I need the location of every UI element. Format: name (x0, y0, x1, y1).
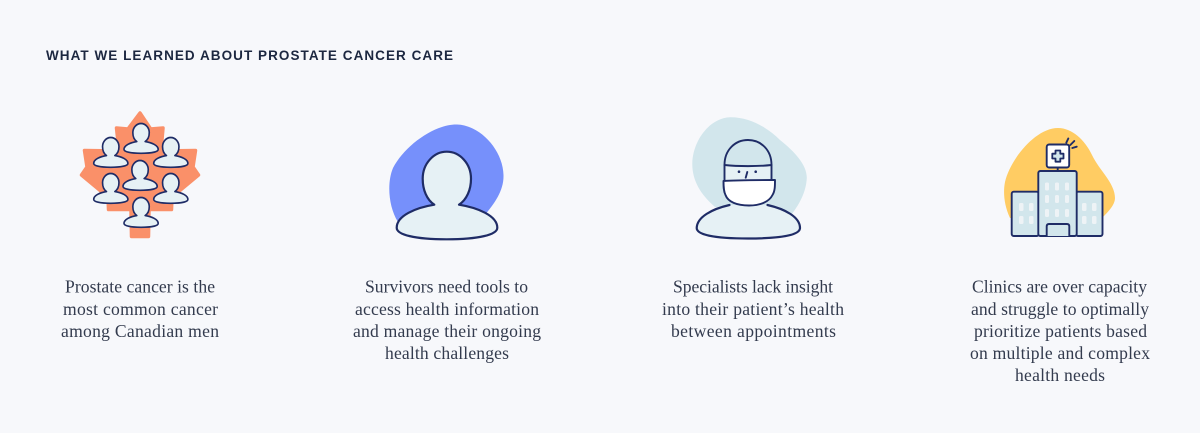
panel: survivors (353, 124, 541, 363)
nose (746, 172, 747, 178)
maple leaf (82, 113, 198, 236)
pale blue blob (692, 117, 807, 214)
text: survivors need tools: Survivors need tools to (365, 276, 528, 296)
main building (1038, 171, 1077, 236)
text: survivors need tools: health challenges (385, 343, 509, 363)
left wing (1012, 192, 1039, 236)
medical cross (1052, 150, 1064, 162)
icon: maple leaf with people (82, 113, 198, 236)
text: prostate cancer statistic: most common cancer (63, 299, 218, 319)
text: specialists lack insight: Specialists lack insight (673, 276, 833, 296)
yellow blob (1004, 128, 1115, 218)
text: clinics over capacity: health needs (1015, 365, 1105, 385)
surgical mask (724, 180, 775, 206)
panel: specialists (662, 117, 844, 341)
text: survivors need tools: and manage their ongoing (353, 321, 541, 341)
text: clinics over capacity: on multiple and complex (970, 343, 1150, 363)
text: prostate cancer statistic: among Canadian men (61, 321, 219, 341)
hospital sign (1047, 144, 1069, 168)
door (1047, 224, 1069, 236)
text: specialists lack insight (662, 276, 844, 341)
sign pole (1057, 168, 1059, 171)
title: WHAT WE LEARNED ABOUT PROSTATE CANCER CARE (46, 48, 453, 63)
panel: most common cancer (61, 113, 219, 341)
right wing (1076, 192, 1102, 236)
text: prostate cancer statistic (61, 276, 219, 341)
icon: masked specialist (692, 117, 807, 238)
icon: hospital (1004, 128, 1115, 236)
person (397, 152, 497, 239)
people group (94, 124, 188, 227)
text: survivors need tools (353, 276, 541, 363)
cap (724, 140, 772, 166)
text: clinics over capacity: prioritize patients based (974, 321, 1147, 341)
text: clinics over capacity (970, 276, 1150, 385)
text: survivors need tools: access health information (355, 299, 539, 319)
windows (1019, 182, 1096, 224)
face band (724, 165, 772, 182)
eyes (738, 170, 757, 173)
icon: survivor silhouette (389, 124, 504, 239)
text: prostate cancer statistic: Prostate cancer is the (65, 276, 215, 296)
blue blob (389, 124, 504, 222)
text: clinics over capacity: and struggle to optimally (971, 299, 1149, 319)
panel: clinics (970, 128, 1150, 385)
shoulders (697, 205, 800, 238)
text: clinics over capacity: Clinics are over capacity (972, 276, 1147, 296)
text: specialists lack insight: into their patient’s health (662, 299, 844, 319)
signal rays (1066, 138, 1077, 148)
text: specialists lack insight: between appointments (671, 321, 836, 341)
